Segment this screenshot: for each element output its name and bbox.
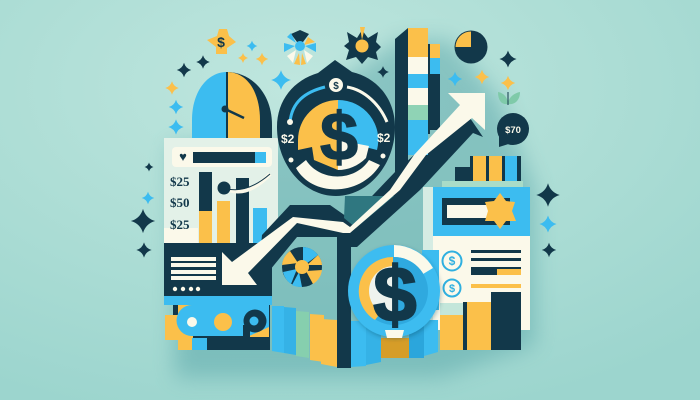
gauge labels: $2 [281,132,295,146]
coins [442,252,462,296]
gauge labels [281,131,391,162]
icon: half-dome clock [192,72,272,138]
icon: pie chart [454,30,488,64]
panel: right card [423,156,530,350]
price labels: $50 [170,195,190,210]
decorative stars [131,41,560,258]
bars: lower middle [272,306,337,367]
big dollar sign: $ [320,99,358,175]
bars [440,292,521,350]
soft shadow [170,40,535,378]
panel: left price chart [164,138,278,244]
gauge with dollar [277,60,395,196]
panel: toggle strip [165,305,270,350]
icon: segmented wheel [282,247,322,287]
panel: dark text card [164,243,272,305]
house frame with zigzag base [240,118,483,368]
arrow: zigzag price trend [222,93,485,285]
price labels [170,174,190,232]
icon: top dollar badge: $ [217,34,225,50]
icon: top dollar badge [207,29,236,54]
icon: dark flower [344,27,381,64]
icon: top blue flower [284,30,316,65]
icon: speech bubble: $70 [505,125,521,136]
icon: star [485,193,516,229]
coins: $ [449,254,456,268]
text lines [471,250,521,288]
gauge top coin: $ [333,81,339,92]
big dollar coin: $ [373,250,417,338]
bar chart [199,172,270,243]
coins: $ [449,283,455,295]
lower blue bars [351,320,438,367]
icon: leaf sprout [498,92,520,105]
gauge labels: $2 [377,131,391,145]
price labels: $25 [170,217,190,232]
big dollar coin [348,245,440,338]
tower chart [395,28,440,190]
heart progress bar: ♥ [179,149,187,164]
icon: speech bubble [497,113,529,147]
blue header [433,187,530,236]
price labels: $25 [170,174,190,189]
small bars above card [442,156,523,188]
